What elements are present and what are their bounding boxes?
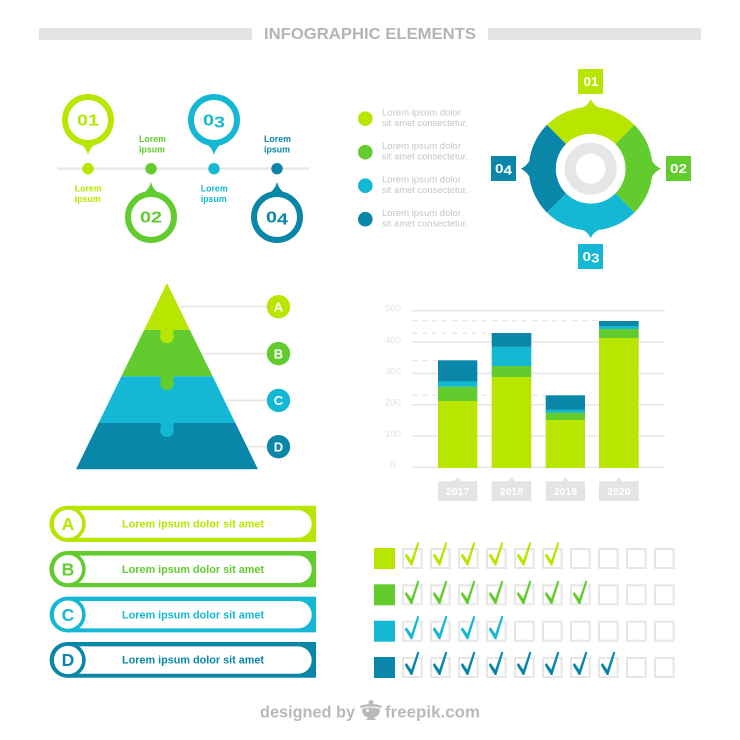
timeline step 02 xyxy=(128,134,174,240)
legend list xyxy=(358,108,468,228)
timeline step 03: Lorem xyxy=(201,184,228,194)
banner C: C xyxy=(62,605,75,625)
timeline step 01 xyxy=(65,97,111,205)
pyramid layer C xyxy=(99,376,235,437)
year tag 2018 xyxy=(492,477,531,501)
chart y axis labels: 200 xyxy=(385,398,401,408)
donut segment 02: 02 xyxy=(670,162,687,176)
year tag 2020 xyxy=(599,477,639,501)
banner D: Lorem ipsum dolor sit amet xyxy=(122,655,264,667)
banner A: Lorem ipsum dolor sit amet xyxy=(122,518,264,530)
year tag 2017 xyxy=(438,477,477,501)
pyramid badge B: B xyxy=(274,346,283,361)
donut segment 03: 3 xyxy=(591,252,600,266)
title xyxy=(39,26,701,43)
donut segment 04 xyxy=(491,125,566,212)
chart y axis labels: 100 xyxy=(385,429,401,440)
donut segment 04: 4 xyxy=(504,164,512,178)
pyramid chart xyxy=(76,283,290,469)
bar 2019 xyxy=(546,395,585,468)
timeline step 03: ipsum xyxy=(201,194,227,205)
checklist row dark blue xyxy=(374,652,674,678)
banner C xyxy=(50,597,316,632)
timeline step 04: Lorem xyxy=(264,134,291,145)
legend list: Lorem ipsum dolor xyxy=(382,141,461,151)
banner B xyxy=(49,551,316,587)
pyramid badge C: C xyxy=(274,393,284,408)
timeline step 01: 01 xyxy=(77,112,99,130)
icon: freepik logo xyxy=(360,700,382,720)
timeline step 04 xyxy=(254,134,300,240)
banner D xyxy=(50,642,316,678)
legend list: sit amet consectetur. xyxy=(382,218,468,228)
year tag 2017: 2017 xyxy=(446,486,469,498)
timeline step 03: 3 xyxy=(214,114,225,132)
chart y axis labels: 300 xyxy=(385,366,401,378)
legend list: sit amet consectetur. xyxy=(382,118,468,128)
year tag 2020: 2020 xyxy=(607,486,631,498)
pyramid connector lines xyxy=(180,306,272,448)
legend list: Lorem ipsum dolor xyxy=(382,108,461,118)
legend list: sit amet consectetur. xyxy=(382,152,468,162)
timeline xyxy=(57,97,309,240)
timeline step 02: Lorem xyxy=(139,134,166,145)
bar 2017 xyxy=(438,360,477,468)
banner B: B xyxy=(62,559,74,579)
donut segment 02 xyxy=(615,125,691,212)
checklist row green xyxy=(374,580,674,605)
donut segment 03: 0 xyxy=(582,250,589,264)
chart y axis labels: 0 xyxy=(390,460,396,471)
timeline step 02: ipsum xyxy=(139,144,165,156)
title: INFOGRAPHIC ELEMENTS xyxy=(264,26,476,43)
pyramid badge A xyxy=(267,295,290,318)
footer credit: designed by xyxy=(260,702,356,722)
pyramid layer B xyxy=(121,330,213,390)
year tag 2018: 2018 xyxy=(500,486,523,498)
donut segment 01: 01 xyxy=(584,75,599,89)
banner B: Lorem ipsum dolor sit amet xyxy=(122,564,264,576)
pyramid badge C xyxy=(267,389,290,412)
chart y axis labels: 400 xyxy=(385,335,401,346)
donut segment 04: 0 xyxy=(495,162,502,176)
legend list: Lorem ipsum dolor xyxy=(382,174,461,184)
banner D: D xyxy=(62,650,74,670)
timeline step 02: 02 xyxy=(140,210,162,226)
donut diagram xyxy=(491,69,691,269)
timeline step 04: ipsum xyxy=(264,144,290,156)
pyramid layer D xyxy=(76,423,258,469)
donut segment 03 xyxy=(547,193,634,269)
footer credit: freepik.com xyxy=(385,702,480,722)
stacked bar chart xyxy=(385,304,665,501)
banner C: Lorem ipsum dolor sit amet xyxy=(122,609,264,621)
banner A: A xyxy=(62,514,75,534)
timeline step 01: ipsum xyxy=(75,194,101,205)
bar 2020 xyxy=(599,321,639,468)
year tag 2019: 2019 xyxy=(554,486,577,498)
chart y axis labels xyxy=(385,304,401,471)
timeline step 01: Lorem xyxy=(75,184,102,194)
footer credit xyxy=(260,700,480,722)
donut segment 01 xyxy=(547,69,634,144)
checklist row lime xyxy=(374,542,674,569)
pyramid badge D xyxy=(267,435,290,458)
timeline step 03: 0 xyxy=(203,112,212,130)
pyramid badge B xyxy=(267,342,290,365)
chart grid lines xyxy=(412,310,665,468)
chart y axis labels: 500 xyxy=(385,304,401,314)
banner A xyxy=(49,506,316,542)
timeline step 03 xyxy=(191,97,237,205)
timeline step 04: 4 xyxy=(277,212,288,228)
legend list: Lorem ipsum dolor xyxy=(382,208,461,218)
timeline step 04: 0 xyxy=(266,210,275,226)
checklist row cyan xyxy=(374,616,674,642)
chart dashed guides xyxy=(412,321,597,395)
donut centre ring xyxy=(570,148,611,189)
bar 2018 xyxy=(492,333,531,468)
pyramid layer A xyxy=(144,283,190,343)
pyramid badge D: D xyxy=(274,440,283,454)
pyramid badge A: A xyxy=(274,300,284,314)
year tag 2019 xyxy=(546,477,585,501)
legend list: sit amet consectetur. xyxy=(382,185,468,195)
